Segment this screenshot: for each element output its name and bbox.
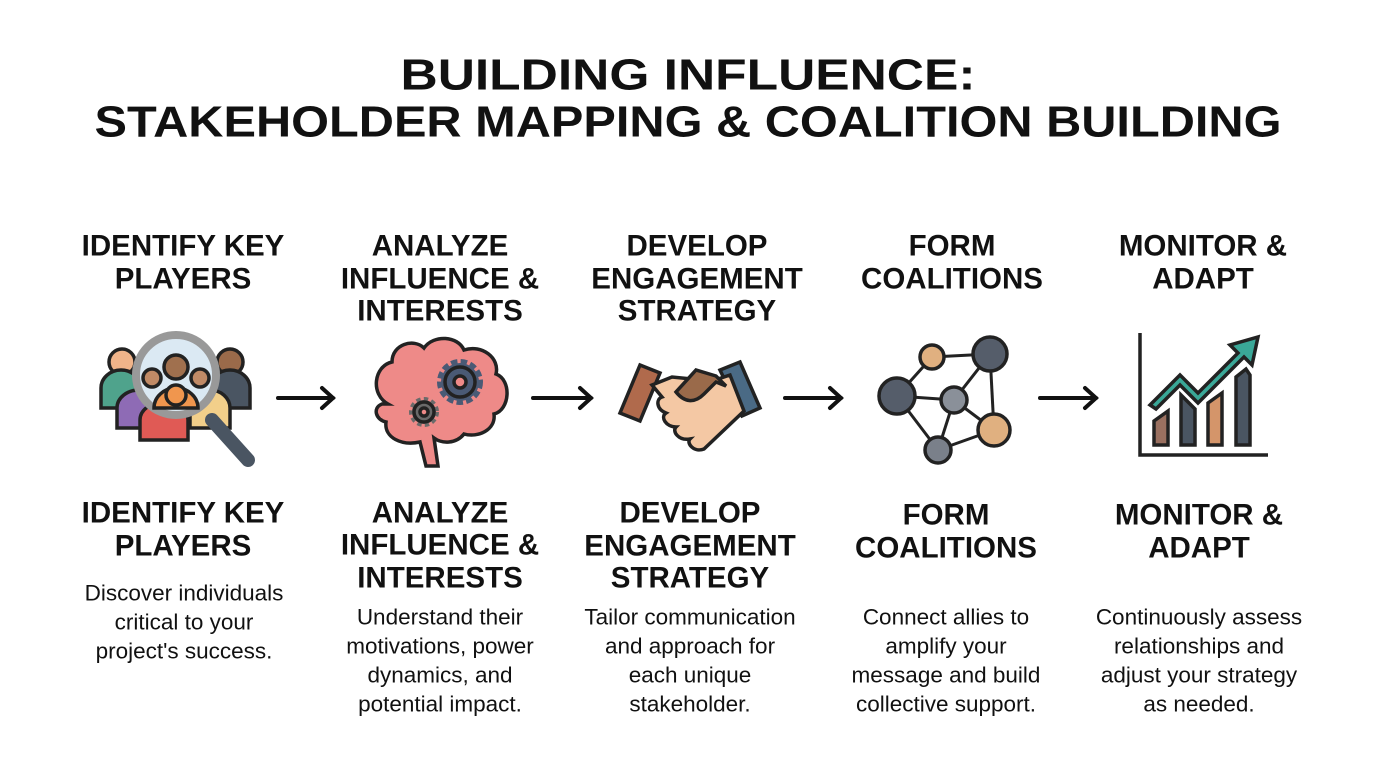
heading: form coalitions (top) (861, 230, 1043, 296)
text block: monitor: Continuously assess (1096, 604, 1302, 630)
text block: identify key players: PLAYERS (115, 530, 251, 562)
heading: analyze (top): INFLUENCE & (341, 262, 539, 296)
heading: develop (top): ENGAGEMENT (591, 262, 803, 296)
text block: develop: STRATEGY (611, 562, 770, 594)
heading: analyze (top): INTERESTS (357, 294, 523, 328)
text block: develop: each unique (629, 662, 751, 688)
text block: monitor: as needed. (1143, 692, 1255, 716)
text block: monitor (1096, 498, 1302, 716)
heading: develop (top): STRATEGY (618, 294, 777, 328)
heading: identify key players (top): PLAYERS (115, 262, 251, 296)
text block: develop: stakeholder. (629, 692, 751, 716)
text block: form coalitions: Connect allies to (863, 604, 1029, 630)
icon: network (879, 337, 1010, 463)
text block: monitor: MONITOR & (1115, 498, 1283, 532)
arrow 3 (785, 388, 841, 408)
text block: analyze: motivations, power (346, 634, 534, 658)
text block: form coalitions: COALITIONS (855, 532, 1037, 564)
heading: monitor (top): MONITOR & (1119, 230, 1287, 262)
text block: develop: DEVELOP (620, 496, 760, 530)
heading: analyze (top) (341, 230, 539, 328)
text block: analyze: INFLUENCE & (341, 528, 539, 562)
icon: handshake (620, 362, 760, 450)
heading: analyze (top): ANALYZE (372, 230, 508, 262)
text block: form coalitions (852, 498, 1040, 716)
arrow 2 (533, 388, 591, 408)
title: STAKEHOLDER MAPPING & COALITION BUILDING (94, 98, 1282, 146)
icon: people with magnifier (101, 335, 250, 460)
text block: analyze (341, 496, 539, 716)
text block: identify key players: project's success. (96, 638, 272, 664)
arrow 1 (278, 388, 333, 408)
heading: form coalitions (top): COALITIONS (861, 262, 1043, 296)
text block: analyze: ANALYZE (372, 496, 508, 530)
text block: develop: ENGAGEMENT (584, 530, 796, 562)
text block: form coalitions: collective support. (856, 692, 1036, 716)
heading: identify key players (top) (82, 230, 285, 296)
icon: growth chart (1140, 333, 1268, 455)
title: BUILDING INFLUENCE: (400, 50, 976, 100)
text block: analyze: Understand their (357, 604, 524, 630)
heading: monitor (top): ADAPT (1152, 262, 1254, 296)
heading: develop (top) (591, 230, 803, 328)
text block: identify key players: IDENTIFY KEY (82, 496, 285, 530)
text block: form coalitions: message and build (852, 662, 1040, 688)
text block: develop: Tailor communication (584, 604, 796, 630)
text block: analyze: potential impact. (358, 692, 522, 716)
text block: monitor: ADAPT (1148, 532, 1250, 564)
text block: monitor: relationships and (1114, 634, 1284, 658)
text block: identify key players (82, 496, 285, 664)
text block: analyze: INTERESTS (357, 562, 523, 594)
heading: develop (top): DEVELOP (627, 230, 767, 262)
title (94, 50, 1282, 146)
text block: monitor: adjust your strategy (1101, 662, 1298, 688)
text block: develop: and approach for (605, 634, 776, 658)
icon: brain with gears (376, 338, 507, 466)
text block: form coalitions: amplify your (885, 634, 1007, 658)
text block: identify key players: Discover individuals (85, 580, 283, 606)
text block: form coalitions: FORM (903, 498, 989, 532)
text block: analyze: dynamics, and (367, 662, 513, 688)
heading: identify key players (top): IDENTIFY KEY (82, 230, 285, 262)
text block: identify key players: critical to your (115, 610, 254, 634)
heading: form coalitions (top): FORM (909, 230, 995, 262)
heading: monitor (top) (1119, 230, 1287, 296)
text block: develop (584, 496, 796, 716)
arrow 4 (1040, 388, 1096, 408)
